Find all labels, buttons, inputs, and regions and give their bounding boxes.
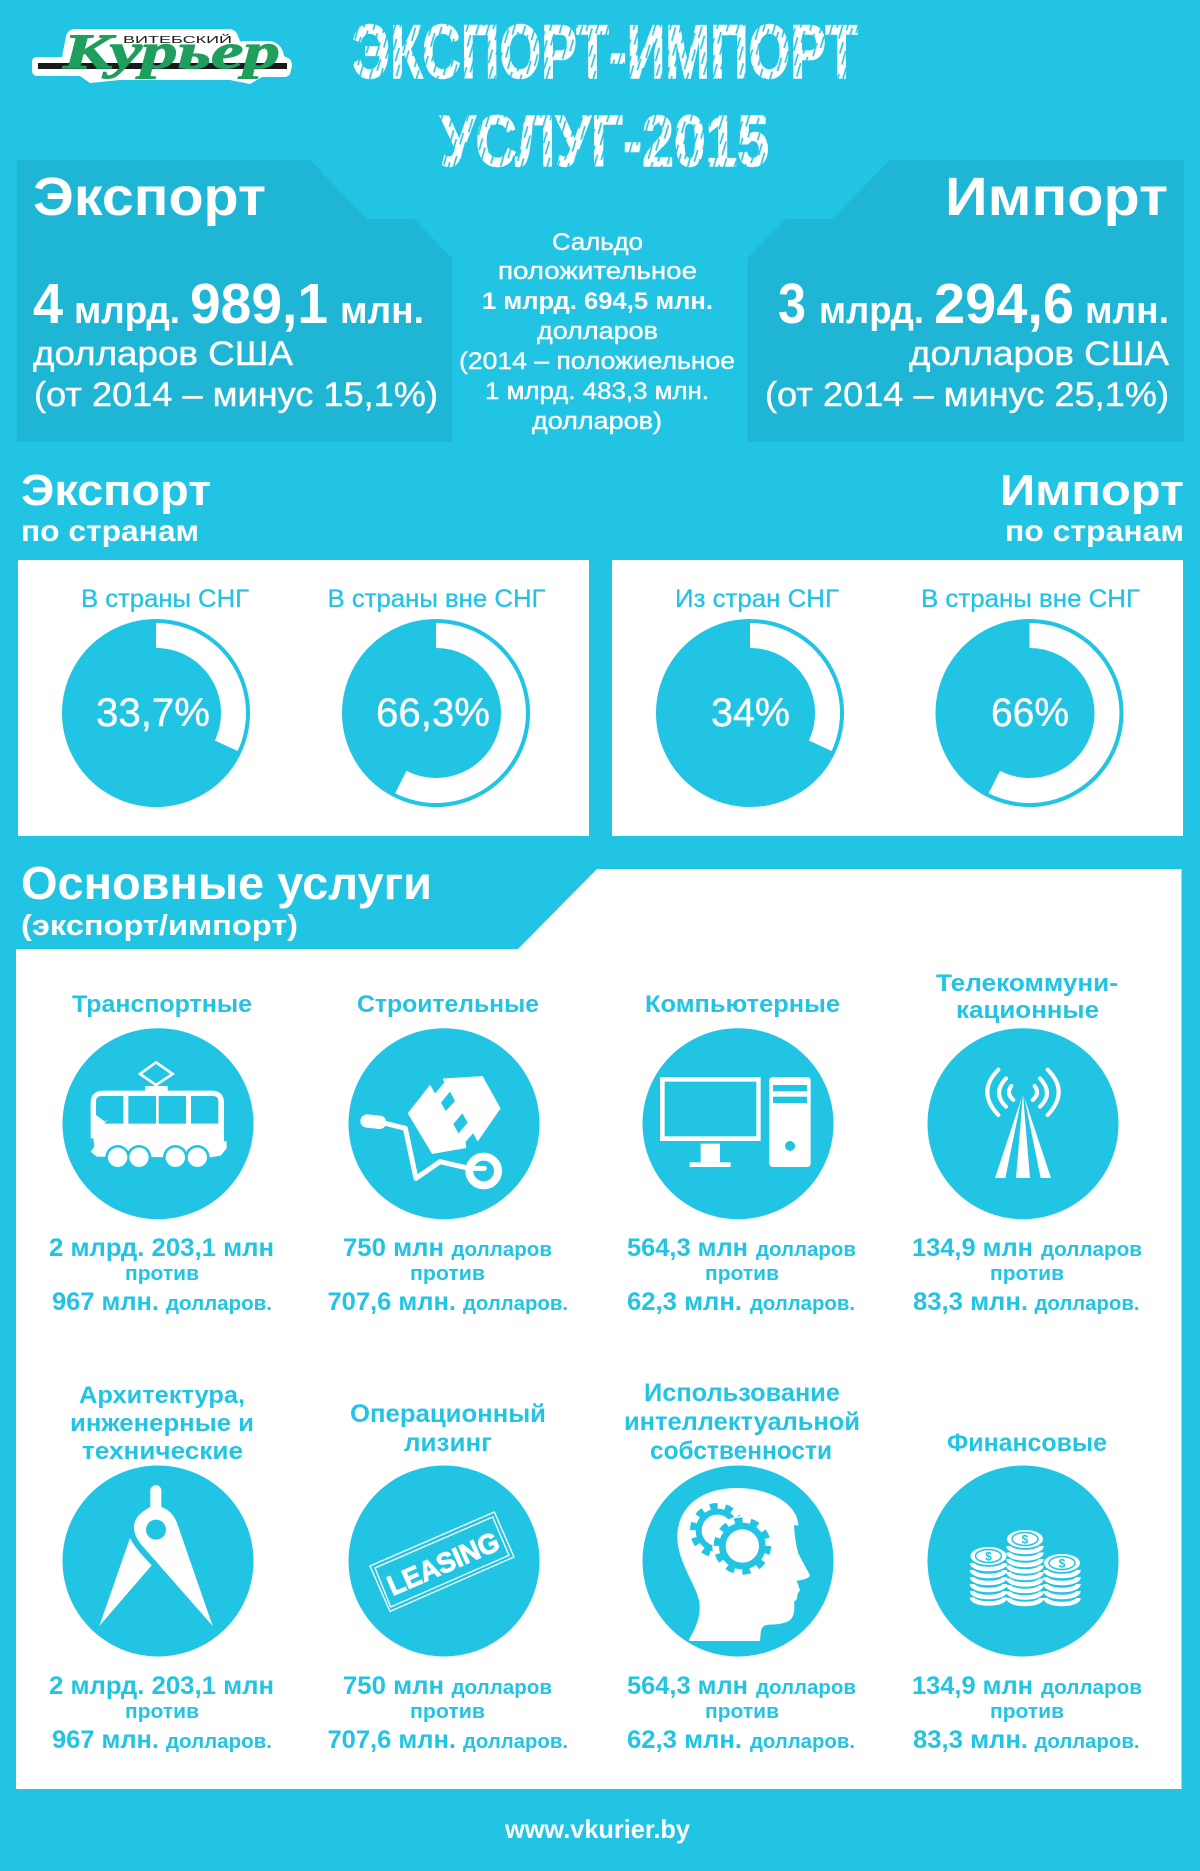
balance text block: 1 млрд. 483,3 млн. <box>485 378 709 405</box>
title: Телекоммуни- <box>936 970 1118 997</box>
values: 967 млн. <box>52 1726 159 1754</box>
service: leasing <box>328 1400 568 1754</box>
values: 62,3 млн. <box>627 1726 742 1754</box>
balance text block: положительное <box>498 258 697 285</box>
heading: export by country: по странам <box>21 515 199 548</box>
values: 2 млрд. 203,1 млн <box>49 1234 274 1262</box>
icon: concrete mixer <box>367 1077 500 1185</box>
values: 2 млрд. 203,1 млн <box>49 1672 274 1700</box>
values: против <box>125 1262 199 1285</box>
values: 134,9 млн <box>912 1234 1033 1262</box>
values: долларов <box>756 1238 856 1261</box>
values: против <box>410 1700 485 1723</box>
values: против <box>705 1262 779 1285</box>
values <box>912 1672 1142 1754</box>
values: долларов. <box>463 1292 568 1315</box>
values: против <box>990 1700 1064 1723</box>
heading: export: Экспорт <box>33 167 266 227</box>
donut: outside CIS 66% <box>921 585 1140 807</box>
title: Финансовые <box>947 1429 1107 1457</box>
values: 707,6 млн. <box>328 1726 456 1754</box>
values <box>49 1234 274 1316</box>
heading: import: Импорт <box>945 167 1168 227</box>
balance text block: долларов <box>537 318 658 345</box>
donut: from CIS 34% <box>656 585 844 807</box>
heading: import by country: по странам <box>1005 515 1184 548</box>
service: financial <box>912 1429 1142 1754</box>
values <box>328 1672 568 1754</box>
values: долларов. <box>166 1730 272 1753</box>
service: transport <box>49 991 274 1316</box>
import note: долларов США <box>909 335 1169 373</box>
panel: export total <box>17 160 452 442</box>
values: 134,9 млн <box>912 1672 1033 1700</box>
export note: (от 2014 – минус 15,1%) <box>34 376 438 414</box>
import amount <box>778 272 1169 336</box>
values: долларов. <box>166 1292 272 1315</box>
values: 750 млн <box>343 1234 444 1262</box>
values <box>912 1234 1142 1316</box>
values: 83,3 млн. <box>913 1288 1028 1316</box>
donut: outside CIS 66.3%: 66,3% <box>376 691 490 735</box>
title <box>70 1382 254 1465</box>
title: УСЛУГ-2015 <box>440 102 769 182</box>
values: долларов. <box>1034 1730 1140 1753</box>
panel: export donuts <box>18 560 589 836</box>
values: 62,3 млн. <box>627 1288 742 1316</box>
title: ЭКСПОРТ-ИМПОРТ <box>352 10 858 95</box>
donut: outside CIS 66%: 66% <box>991 691 1069 735</box>
title: технические <box>82 1438 243 1465</box>
values: долларов. <box>1034 1292 1140 1315</box>
service: intellectual property <box>624 1379 860 1754</box>
heading: export by country: Экспорт <box>21 466 211 515</box>
values: долларов. <box>463 1730 568 1753</box>
title: Использование <box>644 1379 840 1407</box>
values: 564,3 млн <box>627 1234 748 1262</box>
title: Архитектура, <box>79 1382 245 1409</box>
title <box>350 1400 546 1457</box>
icon: leasing stamp <box>370 1512 514 1611</box>
import amount: млрд. <box>819 290 924 332</box>
values: 707,6 млн. <box>328 1288 456 1316</box>
export note: долларов США <box>33 335 293 373</box>
donut: to CIS 33.7%: В страны СНГ <box>81 585 249 613</box>
values: 83,3 млн. <box>913 1726 1028 1754</box>
values <box>627 1234 856 1316</box>
import amount: 294,6 <box>934 272 1074 336</box>
export note <box>33 335 438 414</box>
title: лизинг <box>404 1429 492 1457</box>
icon: coin stacks <box>970 1530 1080 1604</box>
export amount: 989,1 <box>190 272 328 336</box>
heading: main services <box>21 857 432 942</box>
import amount: млн. <box>1085 290 1169 332</box>
title: инженерные и <box>70 1410 254 1437</box>
balance text block <box>459 229 735 435</box>
donut: outside CIS 66.3% <box>328 585 546 807</box>
title <box>936 970 1118 1024</box>
title: Операционный <box>350 1400 546 1428</box>
values: долларов <box>1041 1676 1142 1699</box>
balance text block: долларов) <box>532 408 662 435</box>
icon: coin stacks: $ <box>1022 1532 1029 1546</box>
balance text block: Сальдо <box>552 229 643 256</box>
icon: leasing stamp: LEASING <box>383 1526 504 1602</box>
logo: Курьер <box>62 23 280 79</box>
icon: compass <box>99 1485 213 1626</box>
title: Компьютерные <box>645 991 840 1018</box>
import amount: 3 <box>778 272 806 336</box>
export amount <box>33 272 424 336</box>
values: 564,3 млн <box>627 1672 748 1700</box>
panel: import donuts <box>612 560 1183 836</box>
import note: (от 2014 – минус 25,1%) <box>765 376 1169 414</box>
values: долларов <box>452 1238 552 1261</box>
title: интеллектуальной <box>624 1408 860 1436</box>
icon: head with gears <box>677 1488 810 1641</box>
heading: import by country <box>1000 466 1184 548</box>
values: долларов <box>1041 1238 1142 1261</box>
title <box>352 10 858 182</box>
service: construction <box>328 991 568 1316</box>
heading: main services: Основные услуги <box>21 857 432 909</box>
values: против <box>990 1262 1064 1285</box>
values <box>49 1672 274 1754</box>
values: против <box>125 1700 199 1723</box>
values: долларов <box>452 1676 552 1699</box>
export amount: 4 <box>33 272 63 336</box>
icon: computer <box>660 1077 811 1167</box>
panel: main services <box>16 869 1182 1789</box>
donut: outside CIS 66.3%: В страны вне СНГ <box>328 585 546 613</box>
service: architecture <box>49 1382 274 1754</box>
icon: tram <box>91 1062 227 1170</box>
values: долларов. <box>750 1730 855 1753</box>
title: собственности <box>650 1437 832 1465</box>
values: долларов. <box>750 1292 855 1315</box>
import note <box>765 335 1169 414</box>
export amount: млрд. <box>74 290 180 332</box>
heading: import by country: Импорт <box>1000 466 1184 515</box>
logo: ВИТЕБСКИЙ <box>123 33 232 46</box>
footer url: www.vkurier.by <box>504 1814 691 1844</box>
donut: from CIS 34%: 34% <box>711 691 790 735</box>
title: Транспортные <box>72 991 252 1018</box>
title <box>624 1379 860 1465</box>
values <box>627 1672 856 1754</box>
heading: export by country <box>21 466 211 548</box>
values: 967 млн. <box>52 1288 159 1316</box>
title: Строительные <box>357 991 539 1018</box>
donut: outside CIS 66%: В страны вне СНГ <box>921 585 1140 613</box>
heading: main services: (экспорт/импорт) <box>21 910 298 942</box>
values: долларов <box>756 1676 856 1699</box>
icon: coin stacks: $ <box>1059 1556 1066 1570</box>
values: 750 млн <box>343 1672 444 1700</box>
icon: antenna <box>987 1070 1059 1178</box>
export amount: млн. <box>340 290 424 332</box>
donut: to CIS 33.7%: 33,7% <box>96 691 210 735</box>
donut: to CIS 33.7% <box>62 585 250 807</box>
panel: import total <box>748 160 1184 442</box>
service: computer <box>627 991 856 1316</box>
values <box>328 1234 568 1316</box>
values: против <box>410 1262 485 1285</box>
service: telecom <box>912 970 1142 1316</box>
icon: coin stacks: $ <box>985 1550 992 1564</box>
values: против <box>705 1700 779 1723</box>
logo <box>32 23 292 84</box>
title: кационные <box>956 997 1099 1024</box>
balance text block: (2014 – положиельное <box>459 348 735 375</box>
balance text block: 1 млрд. 694,5 млн. <box>482 288 713 315</box>
donut: from CIS 34%: Из стран СНГ <box>675 585 839 613</box>
